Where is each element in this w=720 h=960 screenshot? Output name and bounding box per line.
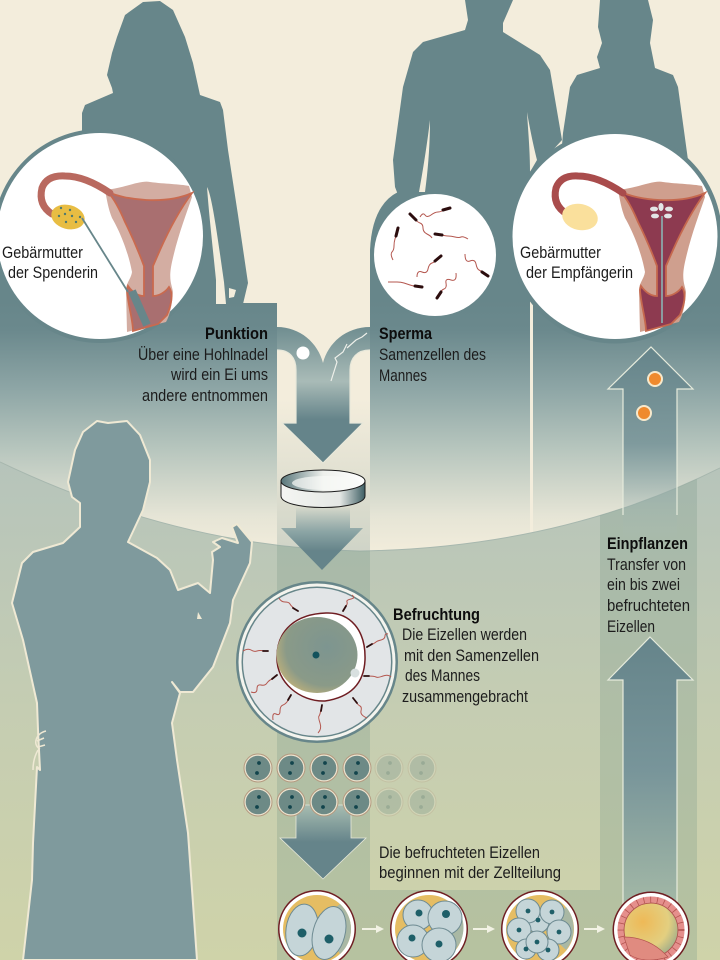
silhouette: recipient woman <box>560 0 690 175</box>
panel: sperm column <box>370 192 530 555</box>
arrow: cell step two <box>473 925 495 933</box>
label: donor uterus: der Spenderin <box>8 263 98 282</box>
icon: blastocyst <box>612 892 690 960</box>
text: Einpflanzen: Transfer von <box>607 555 686 574</box>
icon: recipient ovary <box>560 201 600 233</box>
panel: donor column <box>0 236 277 555</box>
arrow: cell step one <box>362 925 384 933</box>
text: Befruchtung: des Mannes <box>405 666 480 685</box>
icon: donor ovary <box>48 201 88 233</box>
text: Punktion: Über eine Hohlnadel <box>138 345 268 364</box>
icon: orange embryo one <box>648 372 662 386</box>
icon: egg cell large <box>276 613 365 701</box>
text: Einpflanzen: Eizellen <box>607 617 655 636</box>
text: Punktion: Punktion <box>205 324 268 343</box>
arrow: merging funnel <box>277 327 370 463</box>
icon: transfer catheter <box>650 203 673 323</box>
label: recipient uterus: Gebärmutter <box>520 243 601 262</box>
icon: fertilisation dish <box>236 581 398 743</box>
lower background zone <box>0 460 720 960</box>
text: Befruchtung: mit den Samenzellen <box>404 646 539 665</box>
icon: sperm traces <box>331 333 367 381</box>
silhouette: man <box>393 0 562 200</box>
icon: donor uterus circle <box>0 129 207 343</box>
panel: recipient column <box>533 236 720 555</box>
text: Sperma: Mannes <box>379 366 427 385</box>
text: Befruchtung <box>393 605 539 706</box>
text: cell division: beginnen mit der Zellteilung <box>379 863 561 882</box>
icon: eight cell stage <box>501 890 579 960</box>
silhouette: doctor <box>12 421 252 960</box>
icon: fertilised eggs rows <box>244 754 436 816</box>
silhouette: donor woman <box>60 1 248 304</box>
text: Befruchtung: Die Eizellen werden <box>402 625 527 644</box>
arrow: eggs to cell division <box>280 805 366 879</box>
text: Sperma <box>379 324 486 385</box>
text: Befruchtung: zusammengebracht <box>402 687 528 706</box>
arrow: transfer up lower <box>608 637 693 905</box>
label: recipient uterus <box>520 243 633 282</box>
icon: recipient uterus circle <box>508 130 720 344</box>
text: Befruchtung: Befruchtung <box>393 605 480 624</box>
arrow: dish to egg <box>281 508 363 570</box>
icon: sperm around egg <box>243 595 391 733</box>
icon: orange embryo two <box>637 406 651 420</box>
text: Sperma: Sperma <box>379 324 432 343</box>
text: Einpflanzen: Einpflanzen <box>607 534 688 553</box>
text: Sperma: Samenzellen des <box>379 345 486 364</box>
text: Punktion <box>138 324 268 405</box>
text: Einpflanzen <box>607 534 690 636</box>
label: donor uterus: Gebärmutter <box>2 243 83 262</box>
text: Punktion: andere entnommen <box>142 386 268 405</box>
label: donor uterus <box>2 243 98 282</box>
icon: puncture needle <box>82 218 147 325</box>
label: recipient uterus: der Empfängerin <box>526 263 633 282</box>
icon: two cell stage <box>278 890 356 960</box>
text: cell division: Die befruchteten Eizellen <box>379 843 540 862</box>
arrow: transfer up upper <box>608 347 693 540</box>
icon: egg cell <box>296 346 310 360</box>
arrow: cell step three <box>584 925 605 933</box>
icon: four cell stage <box>390 890 468 960</box>
text: Einpflanzen: befruchteten <box>607 596 690 615</box>
icon: sperm circle <box>374 194 496 316</box>
text: cell division <box>379 843 561 882</box>
text: Einpflanzen: ein bis zwei <box>607 575 680 594</box>
text: Punktion: wird ein Ei ums <box>170 365 268 384</box>
icon: petri dish <box>281 470 365 508</box>
